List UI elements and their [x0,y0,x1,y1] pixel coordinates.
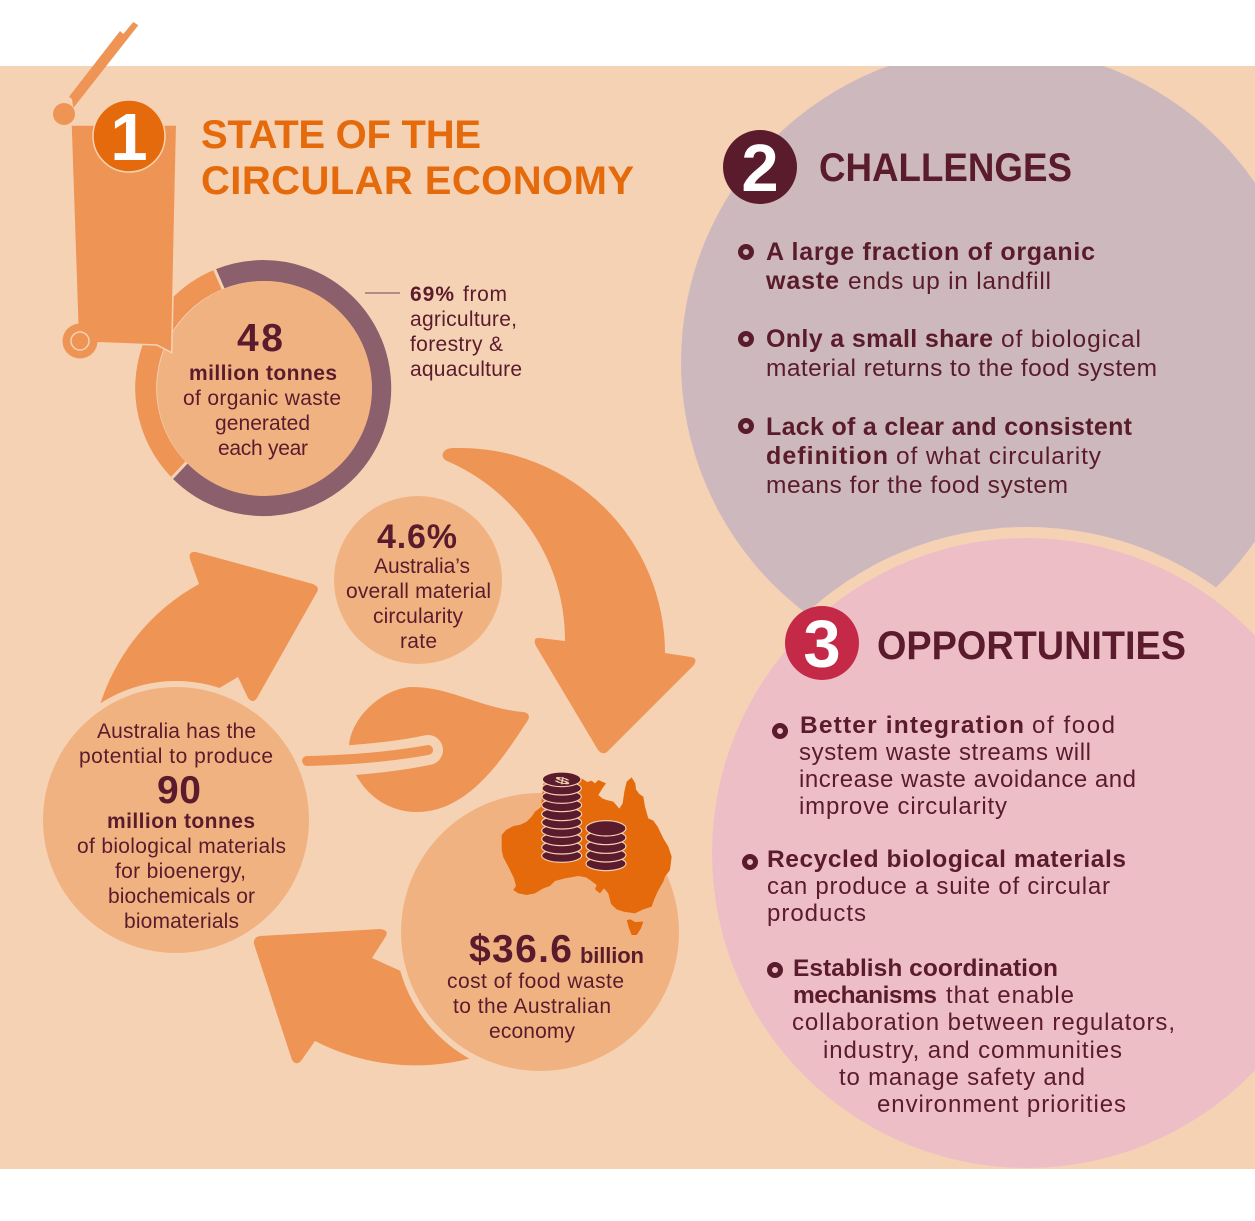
stat circle: 90 million tonnes potential: biomaterials [124,910,239,933]
opportunity: coordination mechanisms: environment priorities [877,1091,1126,1118]
stat circle: 90 million tonnes potential: million tonnes [107,810,255,833]
stat circle: 90 million tonnes potential: biochemicals or [108,885,255,908]
stat circle: 90 million tonnes potential: for bioenergy, [115,860,246,883]
challenge: lack of definition: of what circularity [896,443,1102,470]
challenge: small share returns: material returns to the food system [766,355,1157,382]
donut chart: 48 million tonnes: million tonnes [189,362,337,385]
opportunity: recycled biological materials: products [767,900,866,927]
stat circle: $36.6 billion [398,790,682,1074]
stat circle: 4.6% circularity: 4.6% [377,518,457,556]
donut chart: 48 million tonnes: of organic waste [183,387,341,410]
opportunity: better integration: Better integration [800,712,1024,739]
challenge: organic waste in landfill: A large fraction of organic [766,238,1095,266]
opportunity: better integration: improve circularity [799,793,1007,820]
icon: leaf [307,687,529,812]
opportunity: better integration: of food [1032,712,1115,739]
stat circle: 90 million tonnes potential: 90 [157,769,201,812]
opportunity: coordination mechanisms: industry, and communities [823,1037,1122,1064]
donut chart: 48 million tonnes: 48 [237,317,283,360]
badge 3: 3 [803,607,841,682]
badge 3 [785,606,859,682]
badge 2: 2 [741,131,779,206]
challenge: small share returns [740,325,1157,382]
badge 1: 1 [110,100,148,175]
challenge: organic waste in landfill: ends up in landfill [848,268,1051,295]
opportunity: coordination mechanisms: to manage safety and [839,1064,1085,1091]
challenge: lack of definition: means for the food system [766,472,1068,499]
challenge: small share returns: of biological [1001,326,1141,353]
opportunity: coordination mechanisms: collaboration between regulators, [792,1009,1175,1036]
callout: 69% from agriculture: forestry & [410,333,503,356]
challenge: lack of definition: Lack of a clear and consistent [766,413,1133,441]
stat circle: $36.6 billion: $36.6 [469,928,572,971]
opportunity: better integration: increase waste avoidance and [799,766,1136,793]
heading: challenges: CHALLENGES [819,146,1072,190]
callout: 69% from agriculture: from [463,283,507,306]
challenge: organic waste in landfill: waste [765,267,839,295]
title: state of the circular economy [201,113,634,203]
stat circle: 4.6% circularity [334,496,502,664]
opportunity: coordination mechanisms: mechanisms [793,982,937,1009]
stat circle: 90 million tonnes potential: potential to produce [79,745,273,768]
badge 1 [93,100,165,175]
opportunity: recycled biological materials [744,846,1126,927]
stat circle: $36.6 billion: cost of food waste [447,970,624,993]
circular arrow: top right [442,448,695,753]
opportunity: better integration: system waste streams will [799,739,1091,766]
opportunity: recycled biological materials: Recycled biological materials [767,846,1126,873]
heading: opportunities: OPPORTUNITIES [877,624,1186,668]
circular arrow: bottom [254,929,472,1065]
challenge: organic waste in landfill [740,238,1095,295]
callout: 69% from agriculture: 69% [410,283,454,306]
stat circle: 4.6% circularity: overall material [346,580,491,603]
donut chart: 48 million tonnes: generated [215,412,310,435]
donut chart: 48 million tonnes [146,268,381,506]
stat circle: 90 million tonnes potential: Australia has the [97,720,256,743]
challenge: small share returns: Only a small share [766,325,993,353]
opportunity: recycled biological materials: can produce a suite of circular [767,873,1110,900]
stat circle: $36.6 billion: billion [580,943,644,968]
callout: 69% from agriculture: agriculture, [410,308,517,331]
stat circle: 4.6% circularity: Australia’s [374,555,470,578]
stat circle: 4.6% circularity: circularity [373,605,464,628]
panel: opportunities [701,527,1255,1179]
stat circle: 90 million tonnes potential [40,684,312,956]
opportunity: coordination mechanisms [770,955,1175,1118]
icon: map of Australia with coin stacks: $ [554,774,571,788]
challenge: lack of definition [740,413,1133,499]
challenge: lack of definition: definition [766,442,888,470]
stat circle: $36.6 billion: to the Australian [453,995,611,1018]
opportunity: coordination mechanisms: Establish coordination [793,955,1058,982]
badge 2 [723,130,797,206]
callout: 69% from agriculture: aquaculture [410,358,522,381]
stat circle: 4.6% circularity: rate [400,630,437,653]
opportunity: coordination mechanisms: that enable [946,982,1074,1009]
title: state of the circular economy: CIRCULAR ECONOMY [201,159,634,203]
title: state of the circular economy: STATE OF THE [201,113,481,157]
icon: wheelie bin [53,22,177,358]
icon: map of Australia with coin stacks [502,772,672,935]
opportunity: better integration [774,712,1136,820]
circular arrow: left [99,552,318,708]
callout: 69% from agriculture [365,283,522,381]
stat circle: $36.6 billion: economy [489,1020,576,1043]
panel: challenges [681,66,1255,611]
stat circle: 90 million tonnes potential: of biological materials [77,835,286,858]
donut chart: 48 million tonnes: each year [218,437,308,460]
